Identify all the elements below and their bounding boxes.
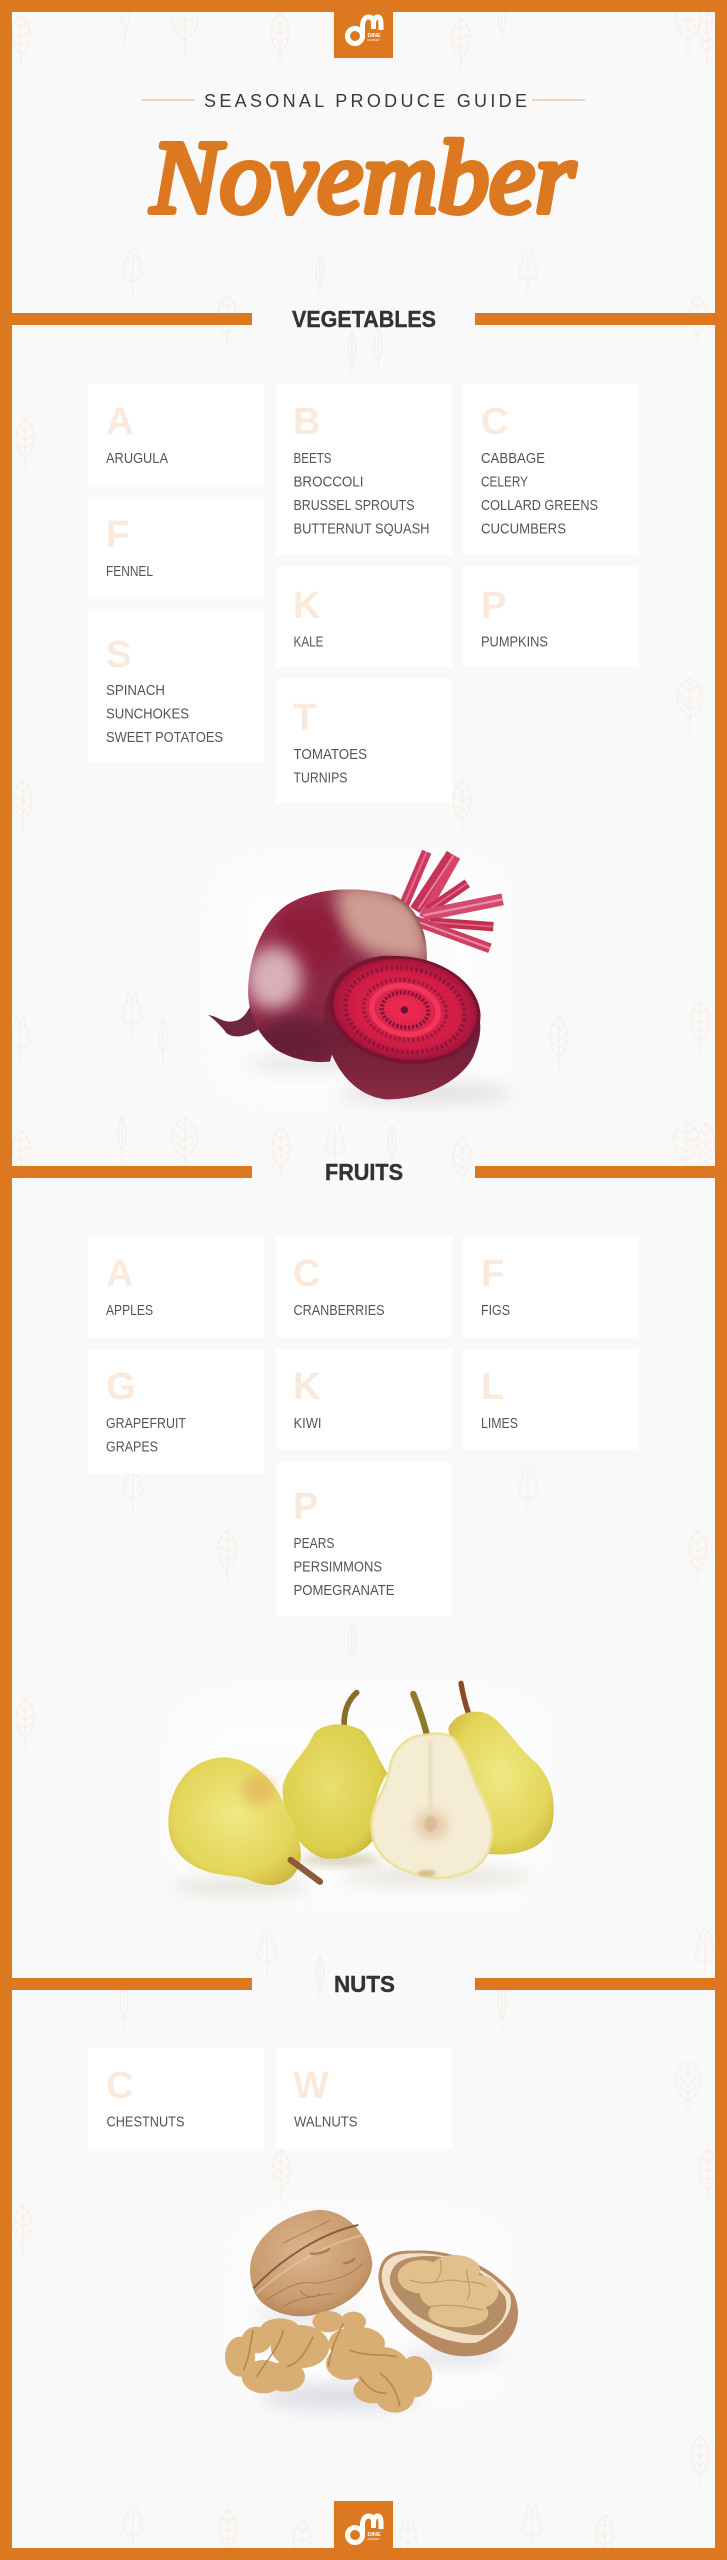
card: S vegetables: S — [106, 634, 131, 676]
card: C vegetables: CUCUMBERS — [481, 522, 566, 538]
logo: bottom — [334, 2501, 393, 2548]
card: C fruits: C — [293, 1253, 320, 1295]
logo: top: MARKET — [368, 38, 380, 42]
card: G fruits: GRAPES — [106, 1440, 158, 1456]
card: B vegetables: BEETS — [294, 451, 332, 467]
card: L fruits: L — [481, 1366, 504, 1408]
illustration: beets — [208, 852, 513, 1103]
card: C vegetables: COLLARD GREENS — [481, 498, 598, 514]
card: C nuts: C — [106, 2065, 133, 2107]
card: L fruits: LIMES — [481, 1416, 518, 1432]
card: F vegetables: F — [106, 514, 129, 556]
card: A fruits — [88, 1236, 264, 1337]
card: P vegetables: PUMPKINS — [481, 634, 548, 650]
card: G fruits — [88, 1349, 264, 1473]
card: S vegetables: SPINACH — [106, 683, 165, 699]
card: P fruits: P — [293, 1486, 318, 1528]
card: T vegetables: TURNIPS — [294, 770, 348, 786]
card: K fruits: KIWI — [294, 1416, 322, 1432]
card: T vegetables — [276, 679, 452, 803]
card: B vegetables — [276, 384, 452, 555]
card: L fruits — [463, 1349, 639, 1449]
card: S vegetables: SWEET POTATOES — [106, 730, 223, 746]
card: K fruits — [276, 1349, 452, 1449]
card: C fruits: CRANBERRIES — [294, 1303, 384, 1319]
card: K vegetables: K — [293, 585, 321, 627]
card: C nuts — [88, 2048, 264, 2149]
card: C vegetables: CABBAGE — [481, 451, 545, 467]
card: P fruits: PERSIMMONS — [294, 1560, 382, 1576]
card: C vegetables: C — [481, 401, 508, 443]
card: F fruits — [463, 1236, 639, 1337]
card: A vegetables — [88, 384, 264, 485]
card: T vegetables: TOMATOES — [294, 747, 367, 763]
card: C fruits — [276, 1236, 452, 1337]
card: K vegetables: KALE — [294, 634, 324, 650]
illustration: walnuts — [225, 2210, 518, 2413]
card: A vegetables: ARUGULA — [106, 451, 168, 467]
logo: top — [334, 0, 393, 58]
section heading: vegetables: VEGETABLES — [292, 306, 436, 332]
card: F fruits: F — [481, 1253, 504, 1295]
card: P fruits: POMEGRANATE — [294, 1583, 395, 1599]
card: S vegetables — [88, 609, 264, 763]
card: C vegetables — [463, 384, 639, 555]
logo: bottom: DINE — [368, 2532, 381, 2538]
card: F fruits: FIGS — [481, 1303, 510, 1319]
section heading: fruits: FRUITS — [325, 1159, 403, 1185]
section heading: fruits — [12, 1159, 715, 1185]
title: seasonal produce guide: SEASONAL PRODUCE GUIDE — [204, 91, 527, 111]
card: W nuts: W — [293, 2065, 329, 2107]
card: P vegetables: P — [481, 585, 506, 627]
section heading: nuts — [12, 1971, 715, 1997]
card: K fruits: K — [293, 1366, 321, 1408]
card: A fruits: APPLES — [106, 1303, 153, 1319]
half shell with kernel — [378, 2250, 518, 2356]
card: B vegetables: BUTTERNUT SQUASH — [294, 522, 430, 538]
card: B vegetables: BRUSSEL SPROUTS — [294, 498, 414, 514]
card: F vegetables: FENNEL — [106, 564, 153, 580]
card: C vegetables: CELERY — [481, 474, 528, 490]
card: S vegetables: SUNCHOKES — [106, 706, 189, 722]
card: P fruits — [276, 1462, 452, 1616]
section heading: nuts: NUTS — [334, 1971, 395, 1997]
card: W nuts: WALNUTS — [294, 2114, 358, 2130]
card: K vegetables — [276, 567, 452, 667]
panel: fruits — [88, 1236, 639, 1616]
panel: nuts — [88, 2048, 452, 2149]
pear: back left — [283, 1693, 387, 1859]
card: W nuts — [276, 2048, 452, 2149]
whole walnut — [250, 2210, 372, 2316]
illustration: pears — [168, 1683, 554, 1907]
panel: vegetables — [88, 384, 639, 803]
card: T vegetables: T — [293, 697, 316, 739]
card: P fruits: PEARS — [294, 1536, 334, 1552]
card: B vegetables: B — [293, 401, 320, 443]
card: A vegetables: A — [106, 401, 133, 443]
logo: top: DINE — [368, 33, 381, 39]
logo: bottom: MARKET — [368, 2537, 380, 2541]
card: G fruits: GRAPEFRUIT — [106, 1416, 186, 1432]
title: November: November — [150, 120, 576, 235]
card: C nuts: CHESTNUTS — [106, 2114, 184, 2130]
kernels — [225, 2311, 432, 2413]
card: P vegetables — [463, 567, 639, 667]
card: B vegetables: BROCCOLI — [294, 474, 364, 490]
pear: halved — [372, 1694, 492, 1878]
pear: back right — [448, 1683, 554, 1855]
card: A fruits: A — [106, 1253, 133, 1295]
section heading: vegetables — [12, 306, 715, 332]
pear: front lying — [168, 1757, 320, 1885]
card: G fruits: G — [106, 1366, 136, 1408]
card: F vegetables — [88, 497, 264, 597]
